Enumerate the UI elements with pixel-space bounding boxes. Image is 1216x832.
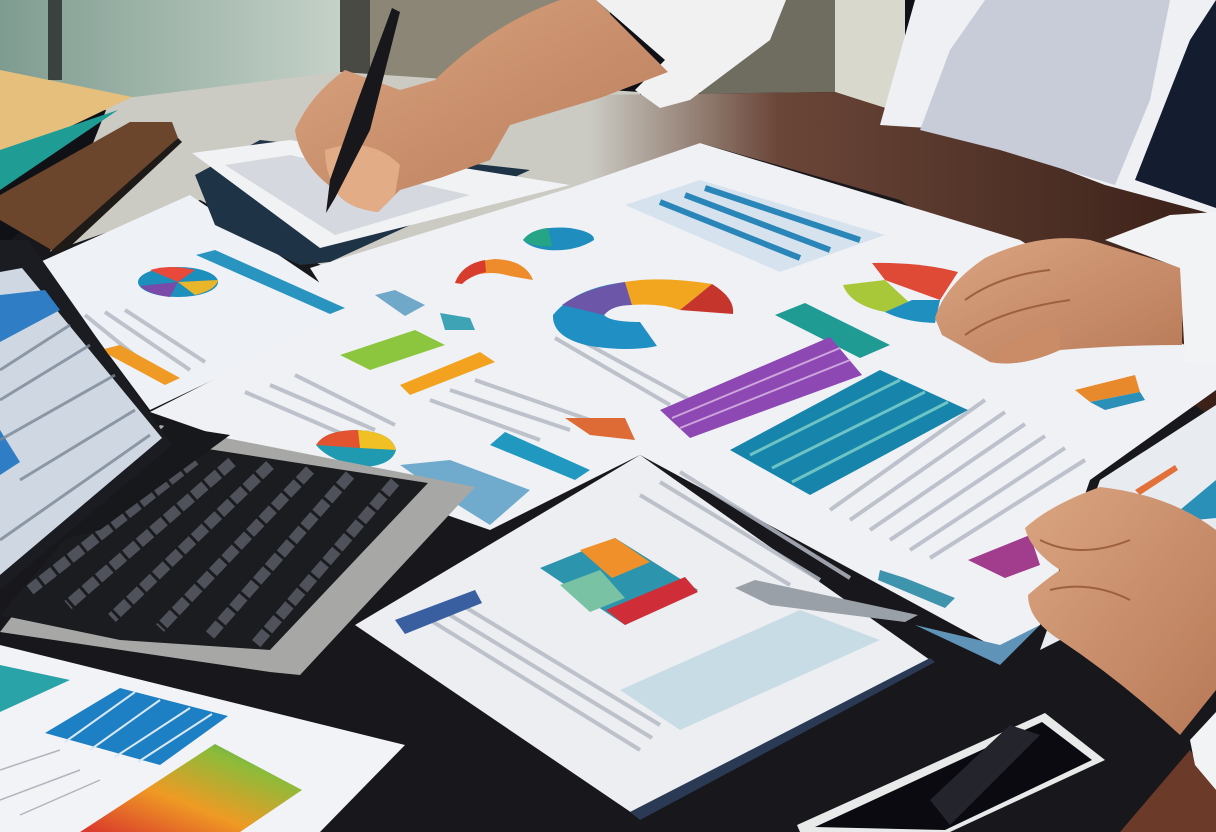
- shirt and vest of analyst: [880, 0, 1216, 215]
- main report sheets: [40, 143, 1216, 820]
- chart: small bars at the sheet corners: [100, 250, 1216, 608]
- pen on the report: [735, 580, 918, 622]
- hand: lower right hand: [1025, 487, 1216, 790]
- phone: [797, 713, 1105, 832]
- hand: writing hand with pen: [295, 0, 668, 213]
- chart: lower sheet stacked bars: [395, 538, 880, 730]
- chart: large ring pie: [553, 279, 733, 349]
- laptop: [0, 240, 475, 675]
- folders top left: [0, 70, 182, 254]
- chart: central teal and purple bars: [660, 303, 968, 495]
- document: clipboard under the pen: [192, 140, 570, 265]
- text hatching: grey report text areas: [85, 310, 1085, 750]
- hand: right hand on the sheet: [935, 212, 1216, 365]
- bottom left report: [0, 645, 405, 832]
- chart: right ribbon pie: [843, 263, 958, 323]
- chart: left sheet bars and pie: [316, 290, 635, 525]
- sleeve: writer's arm: [596, 0, 786, 108]
- chart: small pies: [138, 228, 594, 297]
- chart: top blue bars: [625, 180, 885, 272]
